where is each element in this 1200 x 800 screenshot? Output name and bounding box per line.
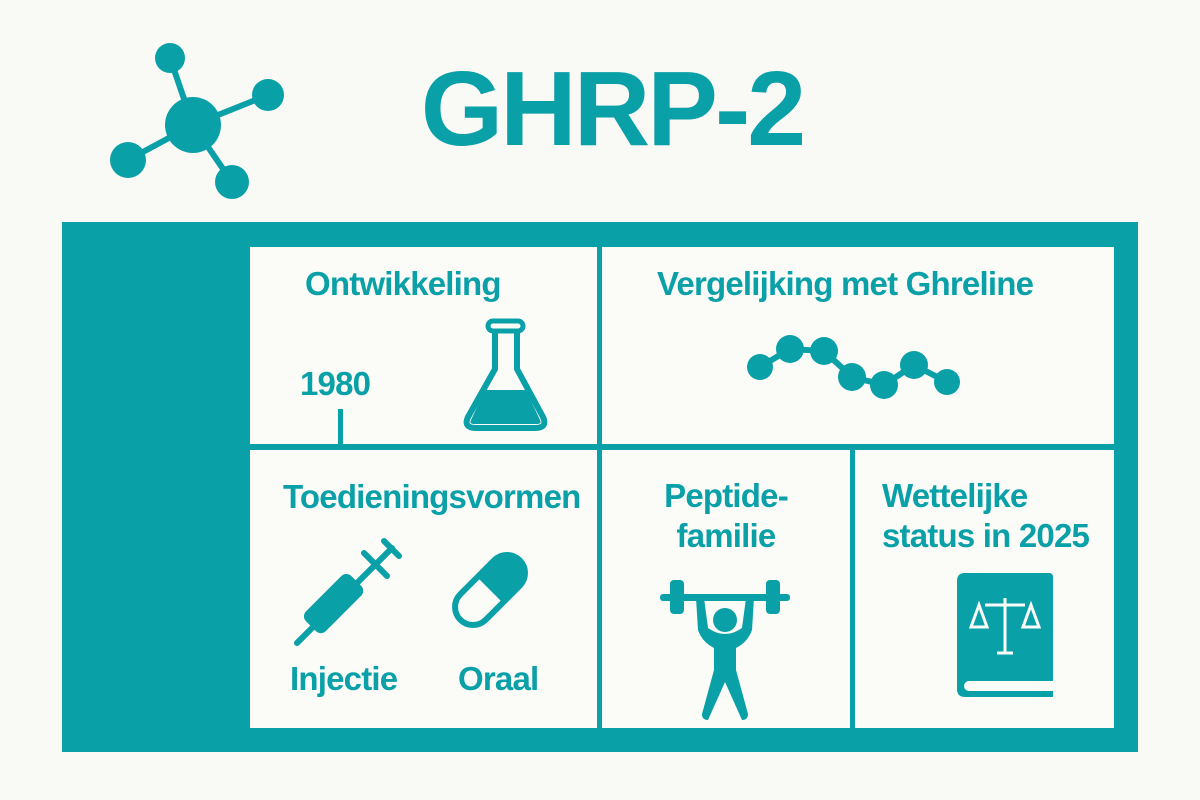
heading: Wettelijke status in 2025 bbox=[882, 477, 1089, 554]
panel: Vergelijking met Ghreline bbox=[602, 247, 1114, 444]
icon: peptide chain bbox=[747, 335, 960, 399]
title: GHRP-2 bbox=[421, 50, 803, 168]
label: Oraal: Oraal bbox=[458, 660, 538, 697]
main teal frame bbox=[62, 222, 1138, 752]
panel: Wettelijke status bbox=[855, 450, 1114, 728]
icon: molecule bbox=[110, 43, 284, 199]
heading: Ontwikkeling: Ontwikkeling bbox=[305, 265, 501, 302]
heading: Vergelijking: Vergelijking met Ghreline bbox=[657, 265, 1033, 302]
panel: Toedieningsvormen bbox=[250, 450, 597, 728]
label: Injectie: Injectie bbox=[290, 660, 397, 697]
heading: Peptide-familie: familie bbox=[677, 517, 775, 554]
timeline tick bbox=[338, 409, 343, 447]
icon: capsule bbox=[452, 552, 528, 628]
heading: Wettelijke status in 2025: Wettelijke bbox=[882, 477, 1027, 514]
icon: syringe bbox=[294, 538, 402, 646]
icon: law book bbox=[957, 573, 1053, 697]
icon: flask bbox=[464, 318, 548, 431]
panel: Peptide-familie bbox=[602, 450, 850, 728]
year label: 1980 bbox=[300, 365, 370, 402]
heading: Wettelijke status in 2025: status in 2025 bbox=[882, 517, 1089, 554]
heading: Toedieningsvormen: Toedieningsvormen bbox=[283, 478, 580, 515]
heading: Peptide-familie bbox=[664, 477, 788, 554]
heading: Peptide-familie: Peptide- bbox=[664, 477, 788, 514]
panel: Ontwikkeling bbox=[250, 247, 597, 444]
icon: weightlifter bbox=[660, 580, 790, 720]
